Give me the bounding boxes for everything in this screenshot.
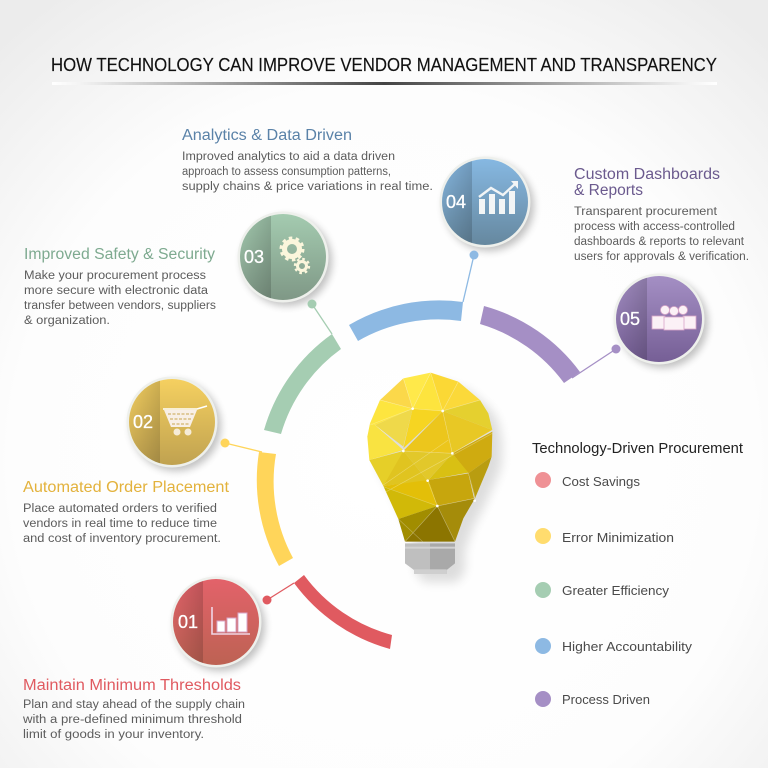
text: safety and security: more secure with electronic data: [24, 285, 209, 297]
arc: yellow: [257, 452, 293, 566]
arc: blue: [349, 300, 463, 341]
step 02 badge: 02: [133, 412, 153, 432]
text: minimum thresholds: Plan and stay ahead of the supply chain: [23, 699, 245, 711]
arc: purple: [480, 306, 580, 383]
text: analytics: supply chains & price variations in real time.: [182, 181, 433, 193]
text: custom dashboards: Custom Dashboards: [574, 166, 720, 183]
text: safety and security: transfer between vendors, suppliers: [24, 300, 216, 312]
arc: green: [264, 334, 341, 434]
text: safety and security: & organization.: [24, 315, 110, 327]
icon: bar chart: [212, 607, 250, 634]
text: automated order placement: Place automated orders to verified: [23, 503, 217, 515]
icon: gears: [281, 238, 309, 273]
text: minimum thresholds: limit of goods in your inventory.: [23, 729, 204, 741]
step 05 badge: [572, 274, 708, 378]
legend: [532, 441, 743, 707]
step 04 badge: 04: [446, 192, 466, 212]
text: automated order placement: Automated Order Placement: [23, 479, 230, 496]
icon: cart: [163, 406, 207, 436]
text: automated order placement: vendors in real time to reduce time: [23, 518, 217, 530]
step 01 badge: [170, 576, 294, 671]
text: safety and security: Make your procurement process: [24, 270, 206, 282]
segmented arc ring: [257, 300, 580, 649]
legend item: greater efficiency: Greater Efficiency: [562, 583, 670, 598]
text: automated order placement: [23, 479, 230, 545]
legend item: higher accountability: Higher Accountability: [562, 639, 693, 654]
legend item: cost savings: [535, 472, 641, 489]
icon: people: [652, 306, 696, 330]
step 01 badge: 01: [178, 612, 198, 632]
text: automated order placement: and cost of inventory procurement.: [23, 533, 221, 545]
text: custom dashboards: [574, 166, 749, 263]
text: analytics: Improved analytics to aid a data driven: [182, 151, 395, 163]
text: analytics: Analytics & Data Driven: [182, 127, 352, 144]
text: minimum thresholds: with a pre-defined minimum threshold: [22, 714, 242, 726]
text: custom dashboards: & Reports: [574, 182, 643, 199]
legend item: cost savings: Cost Savings: [562, 474, 641, 489]
connector 01: [267, 583, 294, 600]
light bulb: [367, 373, 502, 582]
text: custom dashboards: Transparent procurement: [574, 206, 718, 218]
text: analytics: approach to assess consumption patterns,: [182, 166, 391, 178]
text: safety and security: Improved Safety & Security: [24, 246, 215, 263]
title: HOW TECHNOLOGY CAN IMPROVE VENDOR MANAGEMENT AND TRANSPARENCY: [51, 55, 717, 75]
legend heading: Technology-Driven Procurement: [532, 441, 743, 457]
legend item: error minimization: [535, 528, 674, 545]
step 04 badge: [440, 156, 534, 302]
step 05 badge: 05: [620, 309, 640, 329]
legend item: process driven: Process Driven: [562, 692, 650, 707]
text: custom dashboards: dashboards & reports to relevant: [574, 236, 745, 248]
connector 03: [312, 304, 332, 334]
icon: growth chart: [479, 181, 518, 214]
connector 02: [225, 443, 262, 452]
step 03 badge: 03: [244, 247, 264, 267]
step 03 badge: [238, 212, 332, 334]
text: minimum thresholds: Maintain Minimum Thresholds: [23, 677, 241, 694]
text: safety and security: [24, 246, 216, 327]
text: minimum thresholds: [22, 677, 245, 741]
legend item: error minimization: Error Minimization: [562, 530, 674, 545]
text: custom dashboards: users for approvals & verification.: [574, 251, 749, 263]
connector 05: [572, 349, 616, 378]
arc: red: [294, 575, 392, 649]
text: analytics: [182, 127, 433, 193]
connector 04: [463, 255, 474, 302]
text: custom dashboards: process with access-controlled: [574, 221, 735, 233]
step 02 badge: [126, 376, 262, 471]
